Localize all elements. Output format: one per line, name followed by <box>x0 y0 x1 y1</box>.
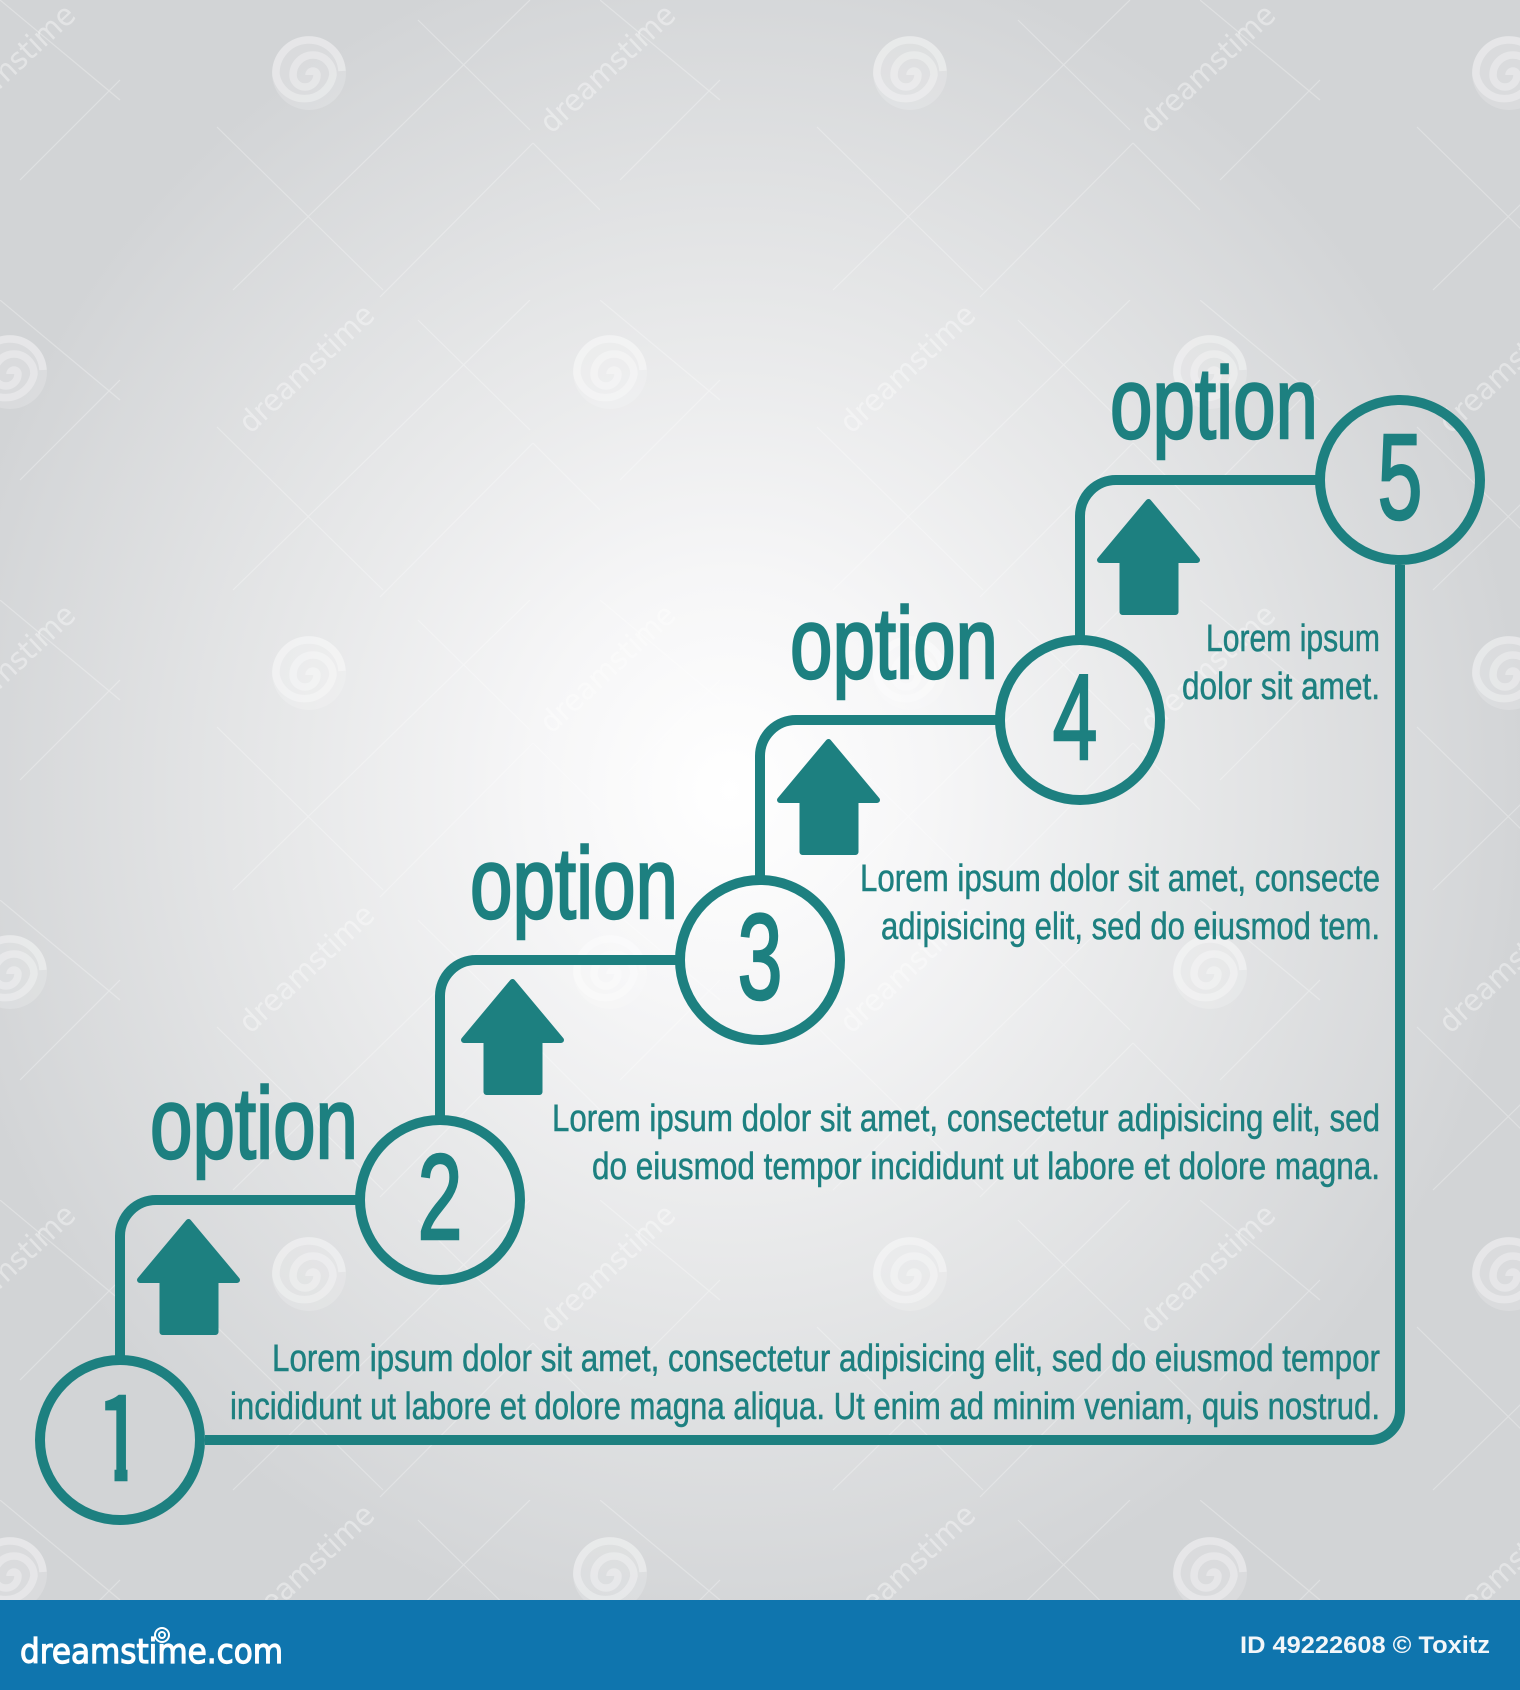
watermark text: dreamstime <box>833 897 983 1040</box>
footer banner <box>0 1600 1520 1690</box>
description 3: Lorem ipsum dolor sit amet, consecte <box>860 858 1380 900</box>
step 3 <box>470 720 1380 1040</box>
footer logo text: dreamstime.com <box>20 1632 283 1672</box>
step 1 <box>40 1200 1380 1520</box>
watermark text: dreamstime <box>533 1197 683 1340</box>
step 4 <box>790 480 1380 800</box>
arrow 1 <box>140 1222 237 1332</box>
circle 3 <box>680 880 840 1040</box>
watermark text: dreamstime <box>833 1497 983 1640</box>
arrow 3 <box>780 742 877 852</box>
arrow 4 <box>1100 502 1197 612</box>
description 1 <box>230 1338 1380 1428</box>
connector: step 1 to step 2 <box>120 1200 360 1360</box>
number 1: 1 <box>96 1343 143 1514</box>
footer image id: ID 49222608 © Toxitz <box>1240 1632 1490 1659</box>
heading: option 4: option <box>1110 348 1318 460</box>
circle 4 <box>1000 640 1160 800</box>
connector: step 2 to step 3 <box>440 960 680 1120</box>
step 5 <box>1110 348 1480 560</box>
description 2 <box>552 1098 1380 1188</box>
connector: step 3 to step 4 <box>760 720 1000 880</box>
circle 2 <box>360 1120 520 1280</box>
watermark text: dreamstime <box>533 597 683 740</box>
heading: option 1: option <box>150 1068 358 1180</box>
description 3 <box>860 858 1380 948</box>
number 2: 2 <box>418 1128 462 1265</box>
watermark text: dreamstime <box>833 297 983 440</box>
description 4: Lorem ipsum <box>1206 618 1380 660</box>
footer logo spiral <box>155 1628 169 1642</box>
connector: step 4 to step 5 <box>1080 480 1320 640</box>
watermark text: dreamstime <box>232 897 382 1040</box>
watermark text: dreamstime <box>232 1497 382 1640</box>
watermark text: dreamstime <box>232 297 382 440</box>
number 5: 5 <box>1378 408 1422 545</box>
arrow 2 <box>464 982 561 1092</box>
number 4: 4 <box>1053 648 1097 785</box>
description 2: do eiusmod tempor incididunt ut labore et dolore magna. <box>592 1146 1380 1188</box>
heading: option 2: option <box>470 828 678 940</box>
circle 1 <box>40 1360 200 1520</box>
watermark text: dreamstime <box>1133 1197 1283 1340</box>
circle 5 <box>1320 400 1480 560</box>
description 3: adipisicing elit, sed do eiusmod tem. <box>881 906 1380 948</box>
heading: option 3: option <box>790 588 998 700</box>
watermark text: dreamstime <box>1133 597 1283 740</box>
description 4 <box>1182 618 1380 708</box>
description 4: dolor sit amet. <box>1182 666 1380 708</box>
number 3: 3 <box>738 888 782 1025</box>
step 2 <box>150 960 1380 1280</box>
connector: bottom line from step 1 to step 5 <box>205 565 1400 1440</box>
